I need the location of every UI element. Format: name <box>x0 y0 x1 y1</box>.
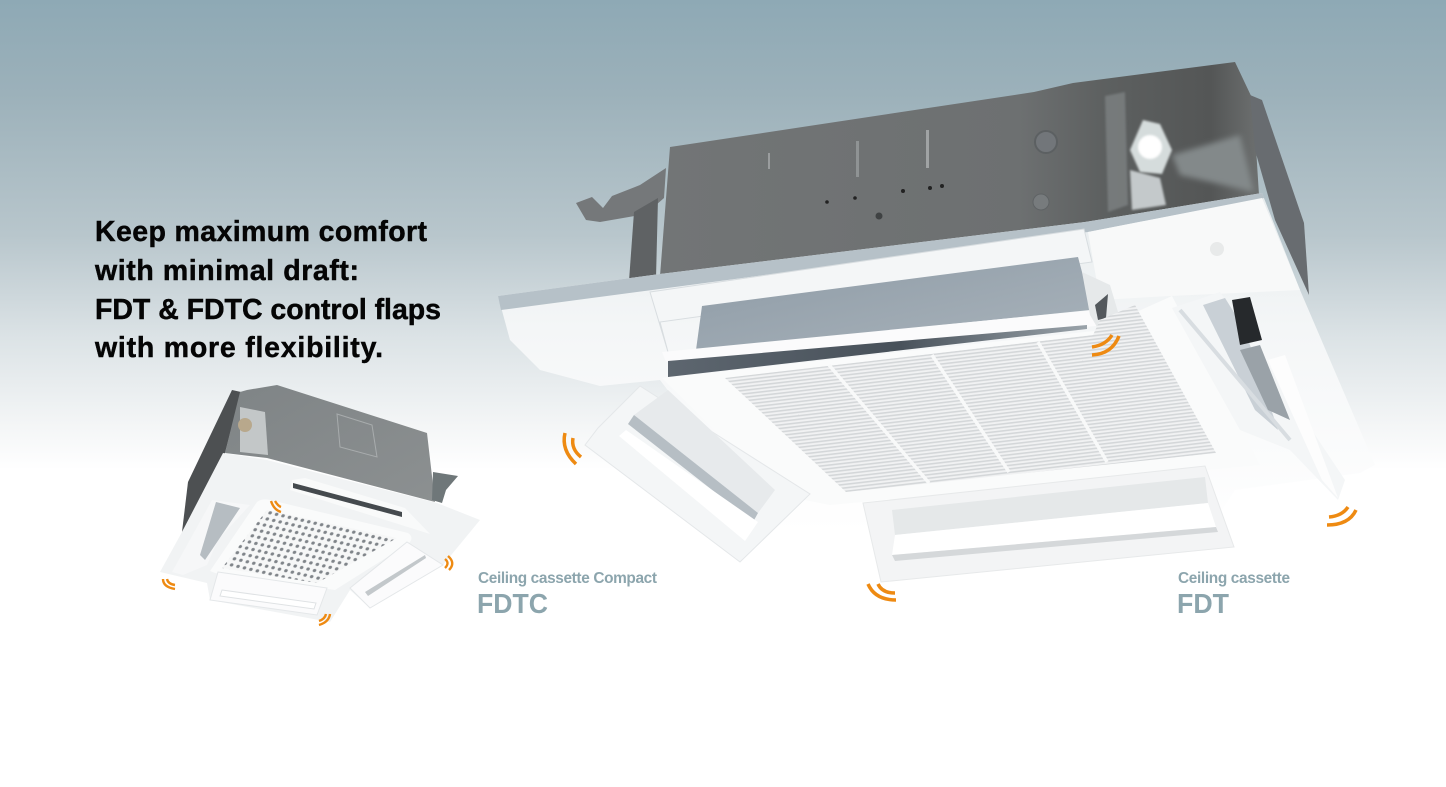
heading: FDT & FDTC control flaps <box>95 294 441 326</box>
heading: Keep maximum comfort <box>95 216 428 248</box>
FDT left open flap <box>585 386 810 562</box>
icon: FDT right flap airflow arcs <box>1327 507 1356 525</box>
FDTC centre panel <box>210 499 412 590</box>
heading: with more flexibility. <box>94 332 383 364</box>
product image: small FDTC ceiling cassette <box>160 385 480 625</box>
FDTC top slot flap <box>290 478 430 534</box>
icon: FDT bottom flap airflow arcs <box>868 584 896 600</box>
icon: FDTC airflow arcs, left <box>163 579 175 589</box>
icon: FDTC airflow arcs, right <box>445 556 452 570</box>
heading: with minimal draft: <box>94 255 359 287</box>
FDT top flap <box>650 229 1118 377</box>
FDTC housing <box>225 385 435 502</box>
FDT panel corner highlight <box>1088 198 1300 300</box>
FDTC left open flap <box>172 500 250 575</box>
FDTC housing details <box>238 407 458 503</box>
FDTC left side face <box>182 390 241 532</box>
FDTC bottom open flap <box>210 572 327 615</box>
FDT bottom open flap <box>863 466 1234 582</box>
product image: large FDT ceiling cassette <box>498 62 1375 600</box>
label: FDT <box>1177 570 1290 619</box>
icon: FDT top flap airflow arcs <box>1092 335 1119 355</box>
label: FDT: FDT <box>1177 588 1229 619</box>
icon: FDT left flap airflow arcs <box>564 433 581 464</box>
FDT centre panel frame <box>662 296 1260 505</box>
label: FDT: Ceiling cassette <box>1178 570 1290 587</box>
background gradient <box>0 0 1446 470</box>
FDT panel lip <box>498 193 1264 310</box>
FDT right side face <box>1250 95 1309 295</box>
FDTC right open flap <box>350 542 443 608</box>
FDT housing details <box>768 92 1254 220</box>
heading <box>94 216 441 364</box>
FDT right open flap <box>1172 292 1345 500</box>
FDT side bracket <box>576 168 666 281</box>
icon: FDTC airflow arcs, top <box>271 501 281 512</box>
FDTC white ceiling panel <box>160 453 480 622</box>
label: FDTC <box>477 570 657 619</box>
FDT white ceiling panel <box>498 193 1375 532</box>
label: FDTC: Ceiling cassette Compact <box>478 570 657 587</box>
FDTC dotted intake grille <box>222 510 397 583</box>
label: FDTC: FDTC <box>477 588 548 619</box>
icon: FDTC airflow arcs, bottom <box>319 614 330 625</box>
FDT housing top <box>660 62 1259 276</box>
FDT air intake grille <box>725 305 1216 492</box>
